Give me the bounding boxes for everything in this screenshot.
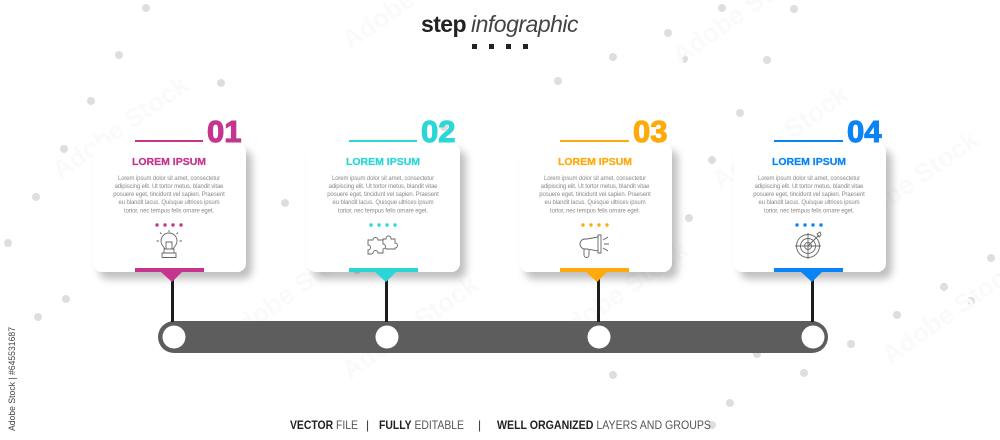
panel: step 2 — [307, 114, 460, 322]
panel: step 4: adipiscing elit. Ut tortor metus, blandit vitae — [755, 184, 864, 190]
watermark: Adobe Stock — [336, 269, 484, 385]
title: step — [421, 11, 466, 37]
panel: step 3: adipiscing elit. Ut tortor metus, blandit vitae — [541, 184, 650, 190]
panel: step 1: adipiscing elit. Ut tortor metus, blandit vitae — [115, 184, 224, 190]
footer text: VECTOR FILE — [290, 420, 358, 432]
stock id: Adobe Stock | #645531687 — [7, 327, 17, 431]
panel: step 4: 04 — [847, 114, 882, 149]
timeline bar — [158, 321, 828, 353]
panel: step 3 — [519, 114, 672, 322]
icon: light bulb — [156, 230, 182, 258]
panel: step 4: eu blandit lacus. Quisque ultrices ipsum — [759, 200, 860, 206]
panel: step 2: posuere eget, tincidunt vel sapien. Praesent — [327, 192, 439, 198]
panel: step 1: posuere eget, tincidunt vel sapien. Praesent — [113, 192, 225, 198]
panel: step 4: posuere eget, tincidunt vel sapien. Praesent — [753, 192, 865, 198]
icon: target — [795, 232, 821, 259]
panel: step 2: Lorem ipsum dolor sit amet, consectetur — [332, 176, 434, 182]
panel: step 2: LOREM IPSUM — [346, 156, 420, 168]
watermark: Adobe Stock — [216, 234, 364, 350]
watermark: Adobe Stock — [836, 124, 984, 240]
footer separator 1: | — [366, 418, 369, 432]
panel: step 1: tortor, nec tempus felis ornare eget. — [124, 208, 214, 214]
panel: step 2: 02 — [421, 114, 455, 149]
panel: step 3: 03 — [633, 114, 667, 149]
footer text 3: WELL ORGANIZED LAYERS AND GROUPS — [497, 420, 711, 432]
panel: step 1: eu blandit lacus. Quisque ultrices ipsum — [119, 200, 220, 206]
panel: step 3: LOREM IPSUM — [558, 156, 632, 168]
panel: step 4: Lorem ipsum dolor sit amet, consectetur — [758, 176, 860, 182]
panel: step 2: adipiscing elit. Ut tortor metus, blandit vitae — [329, 184, 438, 190]
panel: step 1 — [93, 114, 246, 322]
panel: step 2: eu blandit lacus. Quisque ultrices ipsum — [333, 200, 434, 206]
panel: step 1: 01 — [207, 114, 241, 149]
panel: step 3: tortor, nec tempus felis ornare eget. — [550, 208, 640, 214]
watermark: Adobe Stock — [46, 69, 194, 185]
panel: step 4: LOREM IPSUM — [772, 156, 846, 168]
panel: step 2: tortor, nec tempus felis ornare eget. — [338, 208, 428, 214]
watermark: Adobe Stock — [546, 234, 694, 350]
footer separator 2: | — [478, 418, 481, 432]
icon: puzzle — [368, 236, 398, 254]
panel: step 3: posuere eget, tincidunt vel sapien. Praesent — [539, 192, 651, 198]
panel: step 1: Lorem ipsum dolor sit amet, consectetur — [118, 176, 220, 182]
title: infographic — [471, 11, 579, 37]
panel: step 3: Lorem ipsum dolor sit amet, consectetur — [544, 176, 646, 182]
watermark: Adobe Stock — [706, 79, 854, 195]
panel: step 3: eu blandit lacus. Quisque ultrices ipsum — [545, 200, 646, 206]
title — [421, 11, 579, 49]
icon: megaphone — [580, 235, 609, 258]
panel: step 1: LOREM IPSUM — [132, 156, 206, 168]
panel: step 4 — [734, 114, 886, 322]
footer text 2: FULLY EDITABLE — [379, 420, 464, 432]
panel: step 4: tortor, nec tempus felis ornare eget. — [764, 208, 854, 214]
